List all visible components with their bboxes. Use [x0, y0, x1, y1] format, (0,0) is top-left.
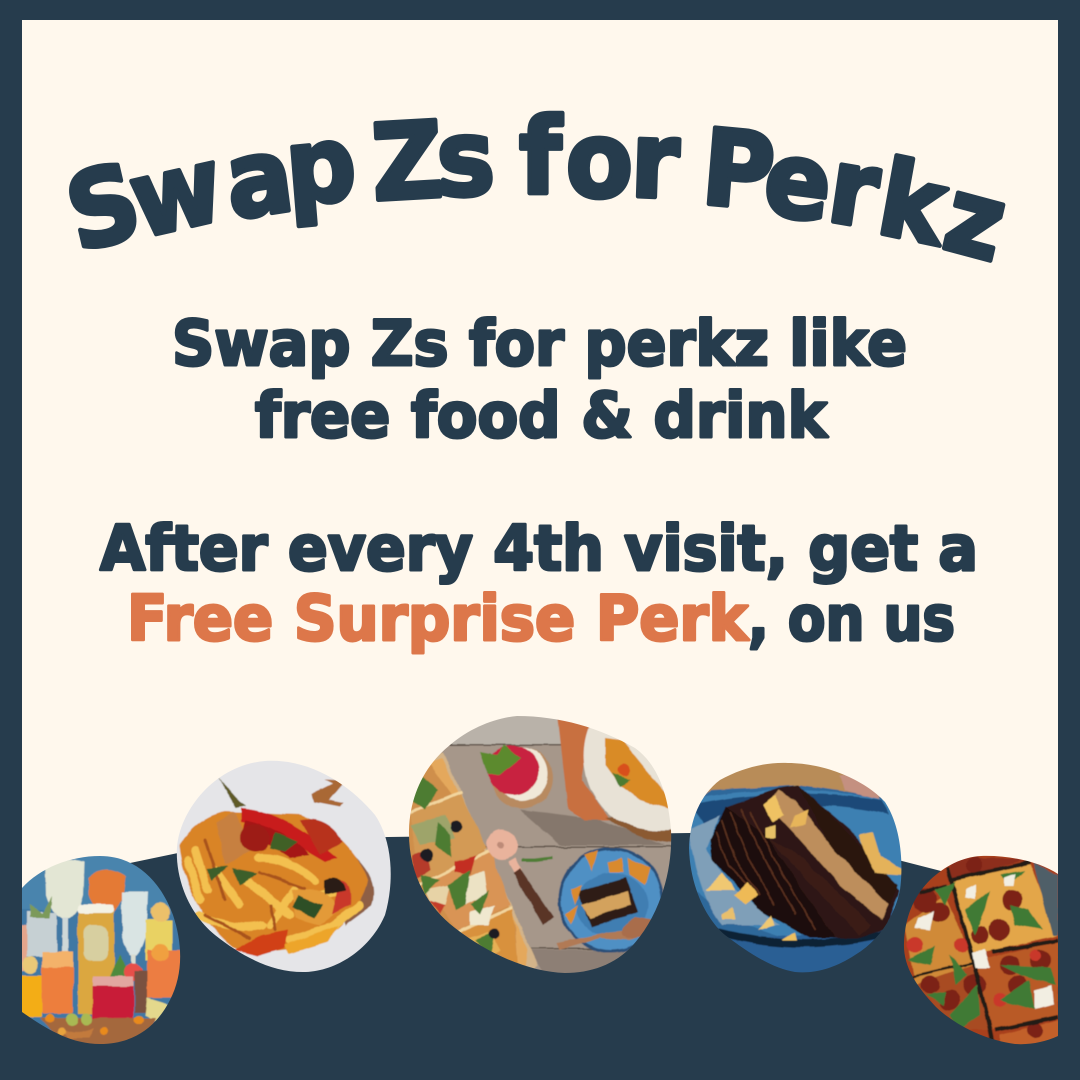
- offer text block: After every 4th visit, get a: [100, 512, 978, 585]
- photo blob: table spread with pizza: [405, 712, 675, 980]
- subtitle text block: free food & drink: [255, 379, 829, 452]
- offer text block: , on us: [748, 582, 955, 655]
- photo blob: pasta plate: [170, 755, 395, 977]
- subtitle text block: Swap Zs for perkz like: [172, 307, 907, 380]
- offer text block: [100, 512, 978, 655]
- photo blob: chocolate cake: [685, 755, 907, 977]
- title: curved heading: Swap Zs for Perkz: [55, 96, 1017, 286]
- offer text block: Free Surprise Perk: [127, 582, 750, 655]
- subtitle text block: [172, 307, 907, 452]
- cream panel: [22, 20, 1058, 900]
- photo blob: drinks: [22, 856, 180, 1044]
- photo blob: pizza slices: [904, 856, 1058, 1044]
